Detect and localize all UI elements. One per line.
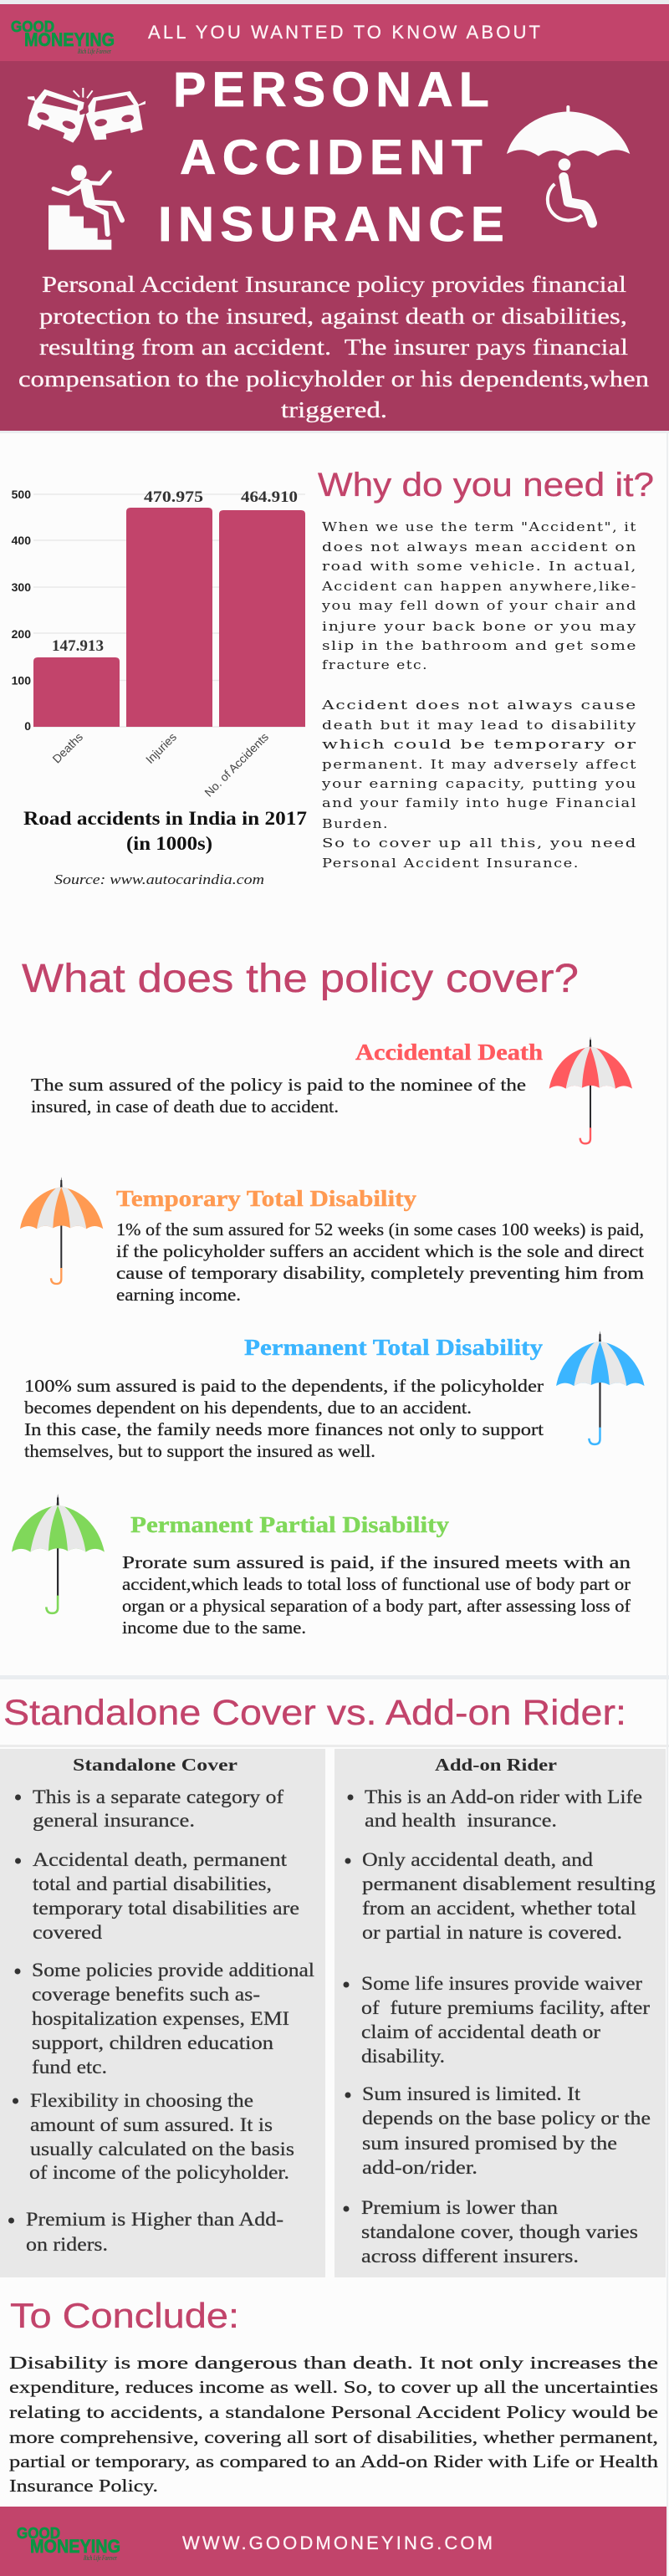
intro text: Personal Accident Insurance policy provides financial (42, 272, 626, 297)
bullet list: fund etc. (32, 2057, 107, 2078)
icon: orange umbrella (20, 1177, 103, 1284)
y axis labels: 400 (12, 534, 31, 547)
subheading: Permanent Total Disability (244, 1335, 544, 1360)
bullet list: Premium is Higher than Add- (26, 2209, 283, 2230)
text: why do you need it: permanent. It may adversely affect (322, 757, 637, 772)
intro text: triggered. (281, 397, 387, 422)
text: why do you need it: injure your back bone or you may (322, 619, 637, 634)
panel: accidental death (31, 1036, 632, 1143)
description: if the policyholder suffers an accident which is the sole and direct (116, 1241, 644, 1261)
text: why do you need it: you may fell down of your chair and (321, 598, 637, 613)
bullet list: Only accidental death, and (362, 1849, 594, 1870)
text: why do you need it: death but it may lead to disability (322, 718, 637, 733)
description: 1% of the sum assured for 52 weeks (in some cases 100 weeks) is paid, (116, 1219, 644, 1239)
description: cause of temporary disability, completely preventing him from (116, 1263, 644, 1283)
bullet list: general insurance. (33, 1810, 195, 1831)
intro text: protection to the insured, against death or disabilities, (39, 304, 627, 329)
icon: green umbrella (12, 1494, 105, 1613)
y axis labels: 0 (24, 719, 31, 733)
bullet list: Sum insured is limited. It (362, 2083, 581, 2104)
text: why do you need it: slip in the bathroom and get some (322, 638, 637, 653)
chart title: Road accidents in India in 2017 (23, 808, 307, 829)
intro text: compensation to the policyholder or his dependents,when (18, 366, 650, 391)
main title: ACCIDENT (180, 130, 488, 185)
website address: WWW.GOODMONEYING.COM (182, 2533, 493, 2553)
bullet list: disability. (361, 2046, 445, 2067)
text: conclusion: Disability is more dangerous than death. It not only increases the (9, 2353, 658, 2373)
logo: Good Moneying: GOOD (17, 2525, 60, 2542)
panel: permanent total disability (24, 1331, 645, 1461)
heading: what does the policy cover: What does the policy cover? (22, 957, 579, 1001)
bullet list: add-on/rider. (362, 2157, 477, 2178)
description (24, 1376, 544, 1461)
logo: Good Moneying: MONEYING (24, 29, 115, 50)
bullet list: total and partial disabilities, (33, 1873, 272, 1894)
bullet list: covered (33, 1922, 103, 1943)
description: Prorate sum assured is paid, if the insured meets with an (122, 1552, 631, 1572)
logo: Good Moneying: Rich Life Forever (83, 2554, 118, 2562)
text: why do you need it: Personal Accident Insurance. (322, 856, 580, 871)
description: organ or a physical separation of a body part, after assessing loss of (122, 1596, 631, 1616)
heading: why do you need it: Why do you need it? (318, 467, 654, 503)
description (122, 1552, 631, 1638)
bullet list: sum insured promised by the (362, 2133, 617, 2154)
description: themselves, but to support the insured as well. (24, 1441, 375, 1461)
main title: PERSONAL (173, 63, 495, 117)
logo: Good Moneying: Rich Life Forever (77, 48, 112, 55)
logo: Good Moneying: GOOD (11, 18, 54, 35)
bullet list (8, 1786, 314, 2255)
bullet list: on riders. (26, 2234, 108, 2255)
text: why do you need it: which could be temporary or (322, 737, 637, 752)
bullet list: temporary total disabilities are (33, 1898, 299, 1919)
subheading: Accidental Death (355, 1040, 543, 1065)
chart title (23, 808, 307, 854)
bar values: 464.910 (241, 488, 298, 506)
panel: temporary total disability (20, 1177, 644, 1305)
text: why do you need it: road with some vehicle. In actual, (322, 559, 637, 574)
bullet list (343, 1786, 656, 2267)
description: becomes dependent on his dependents, due to an accident. (24, 1398, 472, 1418)
description: In this case, the family needs more finances not only to support (24, 1419, 544, 1439)
icon: blue umbrella (556, 1331, 645, 1444)
bullet list: or partial in nature is covered. (362, 1922, 622, 1943)
text: conclusion: Insurance Policy. (9, 2476, 158, 2496)
text: why do you need it (321, 519, 637, 871)
y axis labels: 500 (12, 488, 31, 501)
intro text (18, 272, 650, 422)
icon: person falling on stairs (49, 165, 122, 250)
text: conclusion: expenditure, reduces income as well. So, to cover up all the uncertainties (9, 2377, 658, 2397)
description: earning income. (116, 1285, 241, 1305)
column title: Standalone Cover (73, 1755, 237, 1775)
text: why do you need it: Burden. (322, 816, 389, 831)
bar values: 147.913 (52, 637, 104, 655)
bullet list: Some life insures provide waiver (361, 1973, 642, 1994)
heading: standalone cover vs add-on rider: Standalone Cover vs. Add-on Rider: (3, 1693, 626, 1733)
bullet list: from an accident, whether total (362, 1898, 636, 1919)
chart title: (in 1000s) (126, 833, 212, 854)
text: conclusion: more comprehensive, covering all sort of disabilities, whether permanent, (9, 2427, 658, 2447)
y axis labels: 300 (12, 580, 31, 594)
text: why do you need it: When we use the term "Accident", it (322, 519, 637, 534)
icon: red umbrella (549, 1036, 632, 1143)
bullet list: coverage benefits such as- (32, 1984, 260, 2005)
text: why do you need it: Accident does not always cause (321, 698, 637, 713)
bullet list: Premium is lower than (361, 2197, 559, 2218)
bullet list: standalone cover, though varies (361, 2221, 638, 2242)
bullet list: depends on the base policy or the (362, 2108, 651, 2129)
bullet list: of income of the policyholder. (29, 2162, 289, 2183)
text: why do you need it: Accident can happen anywhere,like- (321, 579, 637, 594)
description: insured, in case of death due to accident. (31, 1096, 339, 1117)
header band (0, 4, 669, 61)
y axis labels: 200 (12, 627, 31, 641)
text: why do you need it: So to cover up all this, you need (322, 836, 637, 851)
footer band (0, 2507, 666, 2576)
bullet list: Some policies provide additional (32, 1960, 314, 1981)
bullet list: Accidental death, permanent (33, 1849, 288, 1870)
panel: add-on rider (334, 1749, 666, 2277)
subheading: Temporary Total Disability (116, 1186, 417, 1211)
bullet list: Flexibility in choosing the (30, 2090, 253, 2111)
bar chart: road accidents in India 2017 (12, 488, 307, 887)
logo: Good Moneying: MONEYING (30, 2536, 120, 2557)
x axis labels: Deaths (49, 730, 85, 765)
y axis labels: 100 (12, 674, 31, 687)
description: accident,which leads to total loss of functional use of body part or (122, 1574, 631, 1594)
heading: to conclude: To Conclude: (10, 2296, 239, 2335)
icon: umbrella over wheelchair (507, 105, 630, 223)
bar values: 470.975 (144, 488, 203, 506)
x axis labels: No. of Accidents (202, 730, 271, 800)
text: conclusion (9, 2353, 659, 2496)
header tagline: ALL YOU WANTED TO KNOW ABOUT (148, 22, 540, 43)
bullet list: hospitalization expenses, EMI (32, 2008, 289, 2029)
main title (158, 63, 510, 252)
subheading: Permanent Partial Disability (130, 1512, 450, 1537)
hero panel (0, 61, 669, 431)
text: conclusion: partial or temporary, as compared to an Add-on Rider with Life or Health (9, 2451, 659, 2471)
logo: Good Moneying (17, 2525, 120, 2562)
bullet list: and health insurance. (365, 1810, 557, 1831)
bullet list: This is a separate category of (33, 1786, 283, 1807)
description: The sum assured of the policy is paid to the nominee of the (31, 1075, 526, 1095)
description (116, 1219, 644, 1305)
text: why do you need it: does not always mean accident on (322, 539, 637, 555)
bullet list: This is an Add-on rider with Life (365, 1786, 642, 1807)
y axis labels (12, 488, 31, 733)
description: income due to the same. (122, 1618, 306, 1638)
description: 100% sum assured is paid to the dependents, if the policyholder (24, 1376, 544, 1396)
column title: Add-on Rider (435, 1755, 557, 1775)
bullet list: usually calculated on the basis (30, 2139, 294, 2159)
bullet list: permanent disablement resulting (362, 1873, 656, 1894)
bar values (52, 488, 298, 655)
logo: Good Moneying (11, 18, 115, 55)
description (31, 1075, 526, 1117)
bars (33, 508, 305, 727)
bullet list: support, children education (32, 2032, 274, 2053)
bullet list: of future premiums facility, after (361, 1997, 650, 2018)
bullet list: amount of sum assured. It is (30, 2114, 273, 2135)
panel: permanent partial disability (12, 1494, 631, 1638)
intro text: resulting from an accident. The insurer pays financial (39, 335, 628, 360)
icon: car crash (28, 88, 146, 143)
panel: standalone cover (0, 1749, 325, 2277)
x axis labels: Injuries (143, 730, 179, 766)
main title: INSURANCE (158, 197, 510, 252)
text: why do you need it: and your family into huge Financial (322, 795, 637, 810)
bullet list: claim of accidental death or (361, 2021, 600, 2042)
x axis labels (49, 730, 271, 800)
text: why do you need it: your earning capacity, putting you (321, 776, 637, 791)
bullet list: across different insurers. (361, 2246, 579, 2267)
text: why do you need it: fracture etc. (322, 657, 428, 672)
chart source: Source: www.autocarindia.com (54, 871, 264, 887)
text: conclusion: relating to accidents, a standalone Personal Accident Policy would be (9, 2402, 658, 2422)
